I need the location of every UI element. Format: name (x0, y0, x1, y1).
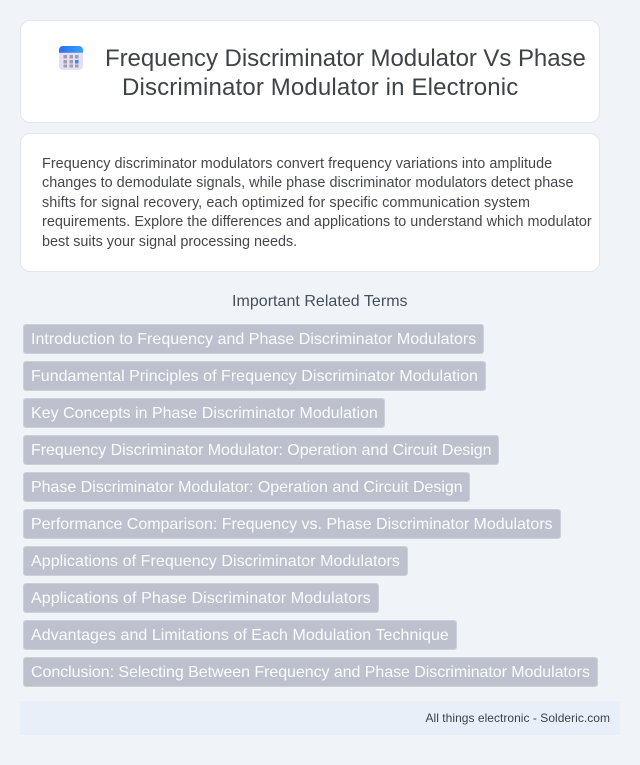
panel: intro card (20, 133, 600, 272)
icon: calendar (59, 46, 83, 70)
chip 5: Phase Discriminator Modulator: Operation and Circuit Design (31, 479, 463, 496)
chip 9: Advantages and Limitations of Each Modulation Technique (31, 627, 449, 644)
chip 10: Conclusion: Selecting Between Frequency and Phase Discriminator Modulators (31, 664, 590, 681)
footer text: All things electronic - Solderic.com (426, 711, 610, 725)
chip 10 (23, 657, 598, 687)
chip 8 (23, 583, 379, 613)
chip 9 (23, 620, 457, 650)
chip 3: Key Concepts in Phase Discriminator Modulation (31, 405, 378, 422)
chip 7: Applications of Frequency Discriminator Modulators (31, 553, 400, 570)
chip 8: Applications of Phase Discriminator Modulators (31, 590, 371, 607)
chip 1: Introduction to Frequency and Phase Discriminator Modulators (31, 331, 476, 348)
chip 7 (23, 546, 408, 576)
chip 4: Frequency Discriminator Modulator: Operation and Circuit Design (31, 442, 491, 459)
text: intro paragraph: Frequency discriminator modulators convert frequency variations into amplitude (42, 156, 552, 172)
text: intro paragraph: best suits your signal processing needs. (42, 234, 297, 250)
chip 1 (23, 324, 484, 354)
chip 4 (23, 435, 499, 465)
text: intro paragraph: requirements. Explore the differences and applications to understand which modulator (42, 214, 592, 230)
heading: title line 2: Discriminator Modulator in Electronic (122, 74, 518, 101)
chip 2: Fundamental Principles of Frequency Discriminator Modulation (31, 368, 478, 385)
chip 5 (23, 472, 470, 502)
chip 2 (23, 361, 486, 391)
chip 3 (23, 398, 385, 428)
panel: title card (20, 20, 600, 123)
text: intro paragraph (42, 156, 592, 250)
heading: related terms: Important Related Terms (232, 293, 408, 310)
list: related term chips (23, 324, 598, 687)
heading: title line 1: Frequency Discriminator Modulator Vs Phase (105, 45, 586, 72)
footer bar (20, 701, 620, 735)
text: intro paragraph: changes to demodulate signals, while phase discriminator modulators detect phase (42, 175, 574, 191)
text: intro paragraph: shifts for signal recovery, each optimized for specific communication system (42, 194, 530, 210)
chip 6: Performance Comparison: Frequency vs. Phase Discriminator Modulators (31, 516, 553, 533)
chip 6 (23, 509, 561, 539)
